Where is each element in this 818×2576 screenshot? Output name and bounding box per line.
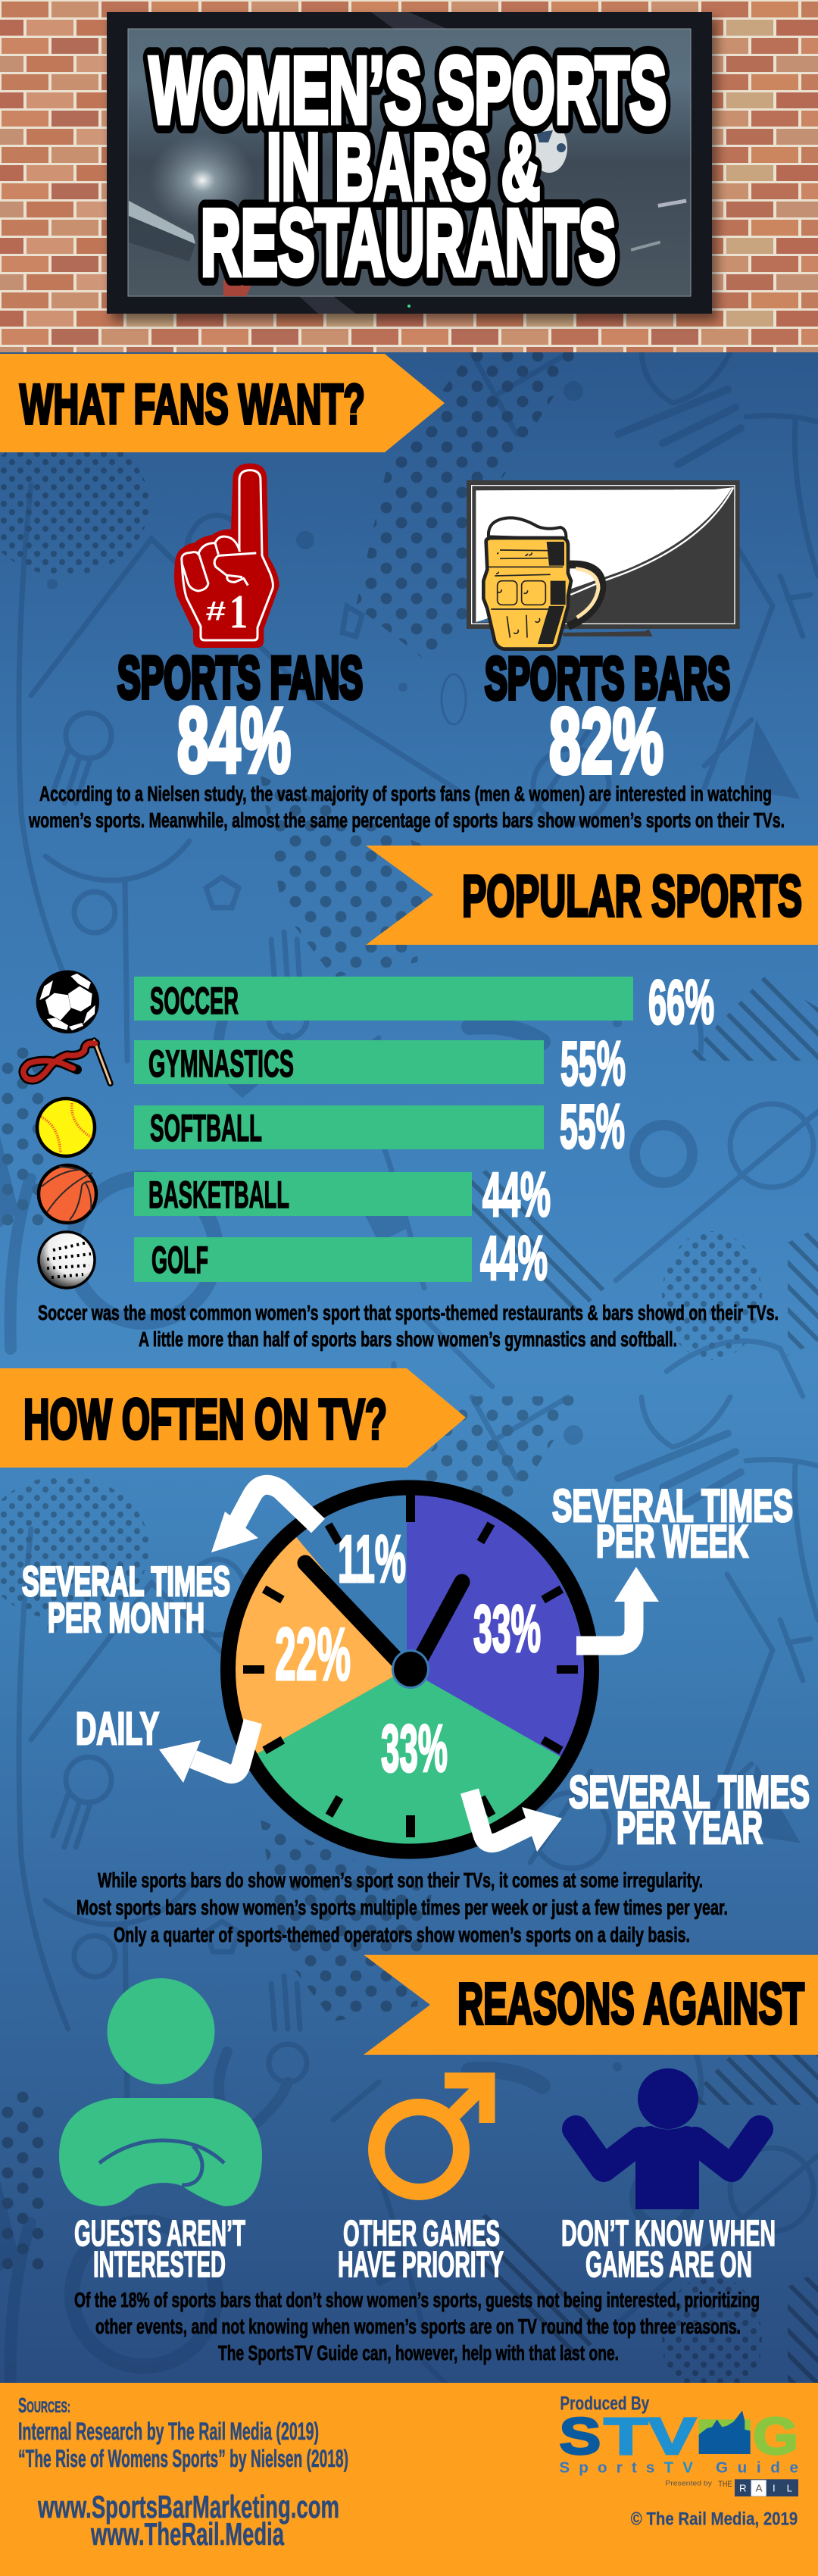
arrow: several times per week	[576, 1567, 659, 1646]
website links: www.SportsBarMarketing.com	[37, 2489, 339, 2524]
title: IN BARS &	[267, 115, 540, 220]
television	[107, 12, 717, 321]
label: sports bars	[485, 645, 730, 792]
produced by logo: A	[756, 2483, 763, 2494]
paragraph: reasons against: The SportsTV Guide can, however, help with that last one.	[218, 2341, 619, 2365]
label: sports bars: 82%	[549, 689, 663, 792]
website links: www.TheRail.Media	[90, 2516, 284, 2552]
label: several times per month	[22, 1558, 230, 1641]
bar chart: popular sports: BASKETBALL	[148, 1174, 289, 1216]
produced by logo: TV	[604, 2407, 696, 2465]
label: several times per month: SEVERAL TIMES	[22, 1558, 230, 1605]
banner: what fans want: WHAT FANS WANT?	[20, 373, 365, 436]
label: sports fans: SPORTS FANS	[117, 644, 363, 711]
arrow: daily	[159, 1721, 253, 1783]
footer panel	[0, 2383, 818, 2576]
label: guests aren't interested: GUESTS AREN’T	[74, 2214, 245, 2254]
website links	[37, 2489, 339, 2552]
icon: person arms crossed	[59, 1978, 262, 2206]
label: several times per year	[569, 1767, 810, 1853]
produced by logo: SportsTV	[559, 2459, 693, 2476]
sources	[18, 2393, 348, 2472]
bar chart: popular sports: SOCCER	[150, 980, 239, 1022]
produced by logo: S	[559, 2407, 601, 2465]
sources: “The Rise of Womens Sports” by Nielsen (2018)	[18, 2445, 348, 2472]
sources: Internal Research by The Rail Media (2019)	[18, 2418, 319, 2445]
icon: softball	[37, 1099, 95, 1156]
bar chart: popular sports: 44%	[482, 1159, 551, 1230]
label: don't know when games are on	[561, 2214, 776, 2285]
bar chart: popular sports: SOFTBALL	[150, 1107, 262, 1149]
icon: foam finger: 1	[229, 585, 248, 638]
label: other games have priority	[338, 2214, 504, 2285]
paragraph: reasons against	[74, 2288, 760, 2365]
produced by logo: Presented by	[665, 2480, 713, 2487]
clock chart: 33%	[473, 1591, 541, 1666]
icon: foam finger: #	[206, 596, 226, 626]
produced by logo: THE	[718, 2480, 732, 2489]
produced by logo: G	[753, 2407, 798, 2465]
label: other games have priority: HAVE PRIORITY	[338, 2245, 504, 2285]
produced by logo: L	[787, 2483, 792, 2494]
paragraph: popular sports	[38, 1301, 779, 1351]
label: daily: DAILY	[76, 1703, 159, 1754]
paragraph: how often	[76, 1868, 728, 1946]
produced by logo: Guide	[716, 2459, 798, 2476]
icon: foam finger	[174, 464, 279, 648]
bar chart: popular sports: 55%	[560, 1091, 625, 1161]
banner: what fans want	[0, 354, 445, 452]
arrow: several times per year	[470, 1791, 562, 1852]
sources: SOURCES:	[18, 2393, 70, 2417]
label: sports fans	[117, 644, 363, 792]
label: guests aren't interested	[74, 2214, 245, 2285]
clock chart: 11%	[338, 1521, 406, 1596]
label: several times per month: PER MONTH	[48, 1594, 204, 1641]
icon: shrugging person	[576, 2068, 760, 2209]
label: several times per week	[552, 1480, 793, 1567]
title: IN BARS &	[267, 115, 540, 220]
produced by logo: I	[773, 2483, 776, 2494]
icon: tv with beer mug	[467, 480, 740, 649]
icon: golf ball	[39, 1232, 95, 1288]
clock chart	[228, 1488, 592, 1852]
produced by logo	[559, 2393, 798, 2530]
icon: gymnastics ribbon	[23, 1040, 111, 1083]
bar chart: popular sports: 66%	[648, 967, 714, 1037]
bar chart: popular sports: 44%	[480, 1223, 548, 1293]
bar chart: popular sports: GOLF	[151, 1239, 208, 1281]
banner: how often on tv	[0, 1368, 466, 1468]
clock chart: 33%	[381, 1711, 448, 1786]
banner: popular sports	[366, 846, 818, 945]
label: guests aren't interested: INTERESTED	[93, 2245, 226, 2285]
icon: male symbol	[376, 2080, 487, 2192]
title	[149, 39, 667, 295]
banner: reasons against	[364, 1955, 818, 2055]
banner: how often on tv: HOW OFTEN ON TV?	[23, 1387, 387, 1451]
label: sports fans: 84%	[177, 689, 291, 792]
produced by logo: Produced By	[560, 2393, 649, 2415]
label: other games have priority: OTHER GAMES	[343, 2214, 500, 2254]
bar chart: popular sports: 55%	[560, 1028, 626, 1099]
arrow: several times per month	[211, 1485, 318, 1552]
icon: basketball	[39, 1165, 96, 1223]
bar chart: popular sports	[134, 967, 714, 1293]
bar chart: popular sports: GYMNASTICS	[148, 1043, 294, 1085]
clock chart: 22%	[275, 1612, 351, 1696]
produced by logo: R	[739, 2483, 747, 2494]
icon: soccer ball	[36, 971, 99, 1033]
paragraph: what fans want	[28, 782, 785, 832]
brick wall	[0, 0, 818, 353]
